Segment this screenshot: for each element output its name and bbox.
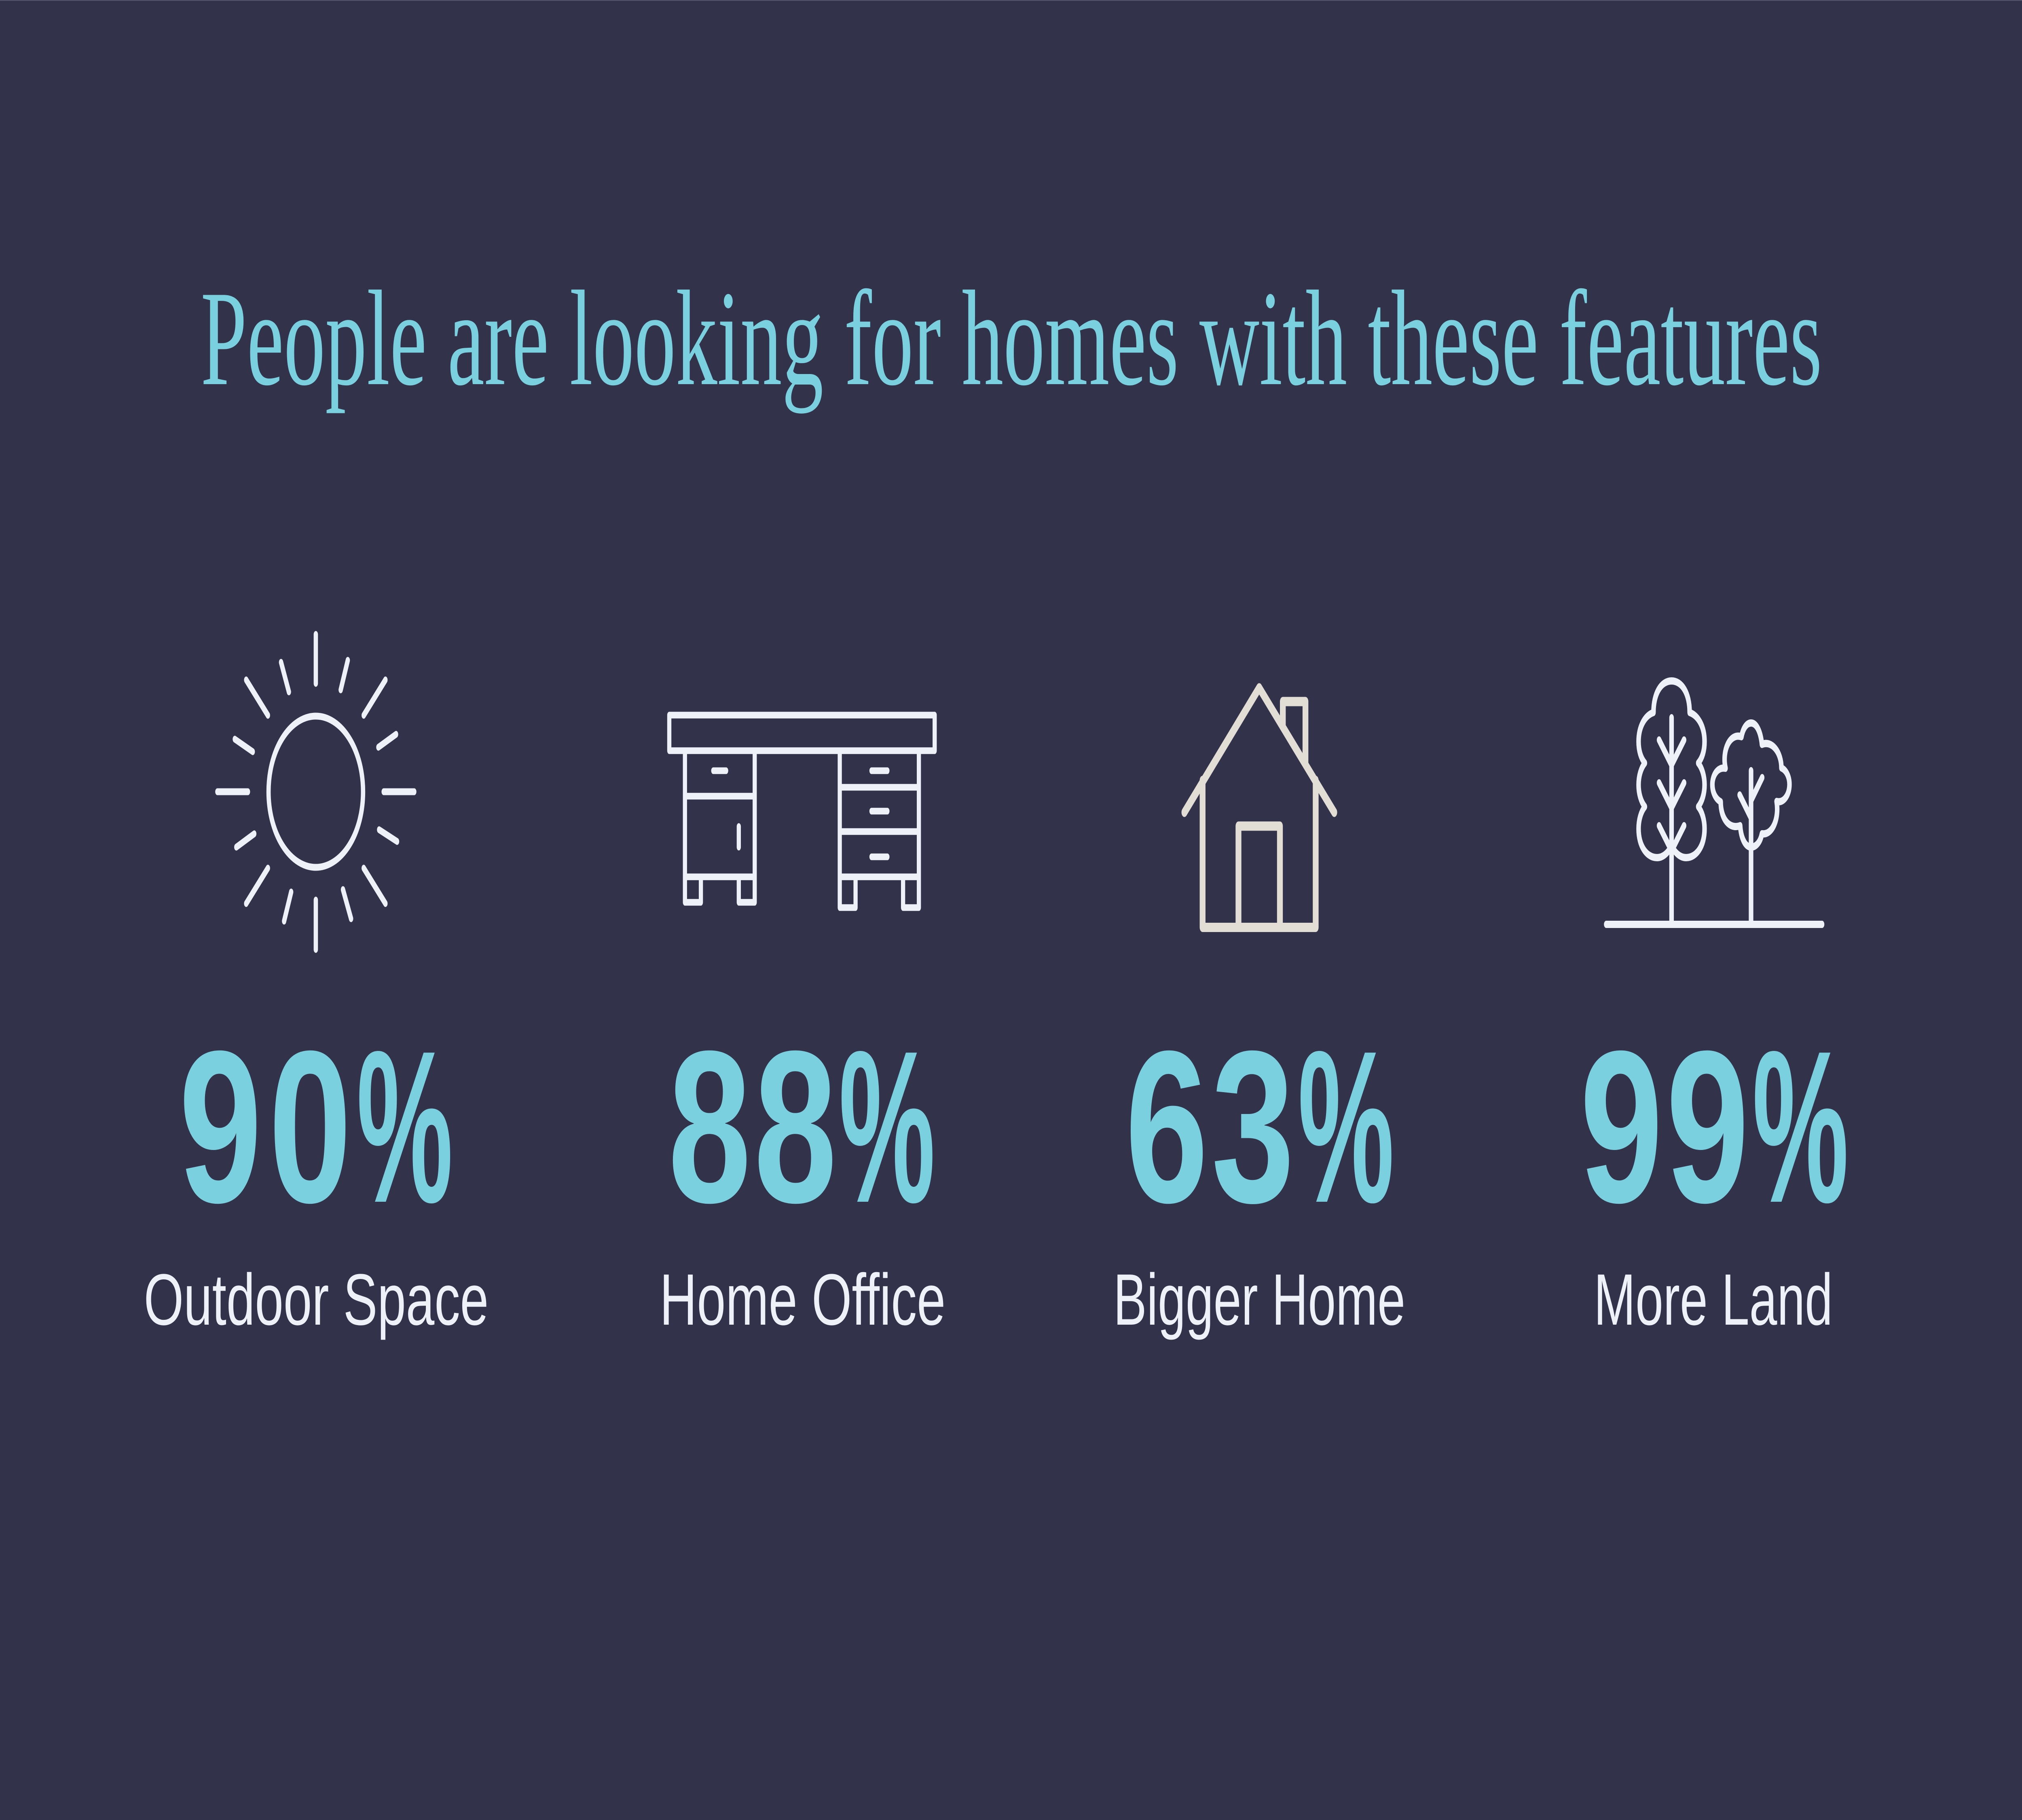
- value: 90%: 90: [179, 1006, 351, 1248]
- value: 99%: %: [1752, 1005, 1849, 1248]
- label: Home Office: Home Office: [660, 1259, 945, 1340]
- panel: bigger home: [1113, 688, 1405, 1340]
- value: 63%: 63: [1125, 1006, 1294, 1248]
- title: People are looking for homes with these features: [201, 263, 1822, 414]
- panel: more land: [1580, 681, 1849, 1340]
- value: 88%: [668, 1005, 935, 1248]
- label: More Land: More Land: [1594, 1259, 1833, 1340]
- label: Outdoor Space: Outdoor Space: [144, 1259, 489, 1340]
- value: 99%: 99: [1580, 1006, 1749, 1248]
- panel: home office: [660, 715, 945, 1340]
- value: 63%: %: [1298, 1005, 1394, 1248]
- icon: trees: [1606, 681, 1822, 924]
- icon: house: [1184, 688, 1334, 928]
- panel: outdoor space: [144, 634, 489, 1340]
- label: Bigger Home: Bigger Home: [1113, 1259, 1405, 1340]
- value: 99%: [1580, 1005, 1849, 1248]
- value: 88%: %: [839, 1005, 935, 1248]
- value: 90%: %: [357, 1005, 453, 1248]
- value: 88%: 88: [668, 1006, 837, 1248]
- value: 63%: [1125, 1005, 1394, 1248]
- icon: sun: [218, 634, 414, 949]
- icon: desk: [669, 715, 935, 907]
- value: 90%: [179, 1005, 453, 1248]
